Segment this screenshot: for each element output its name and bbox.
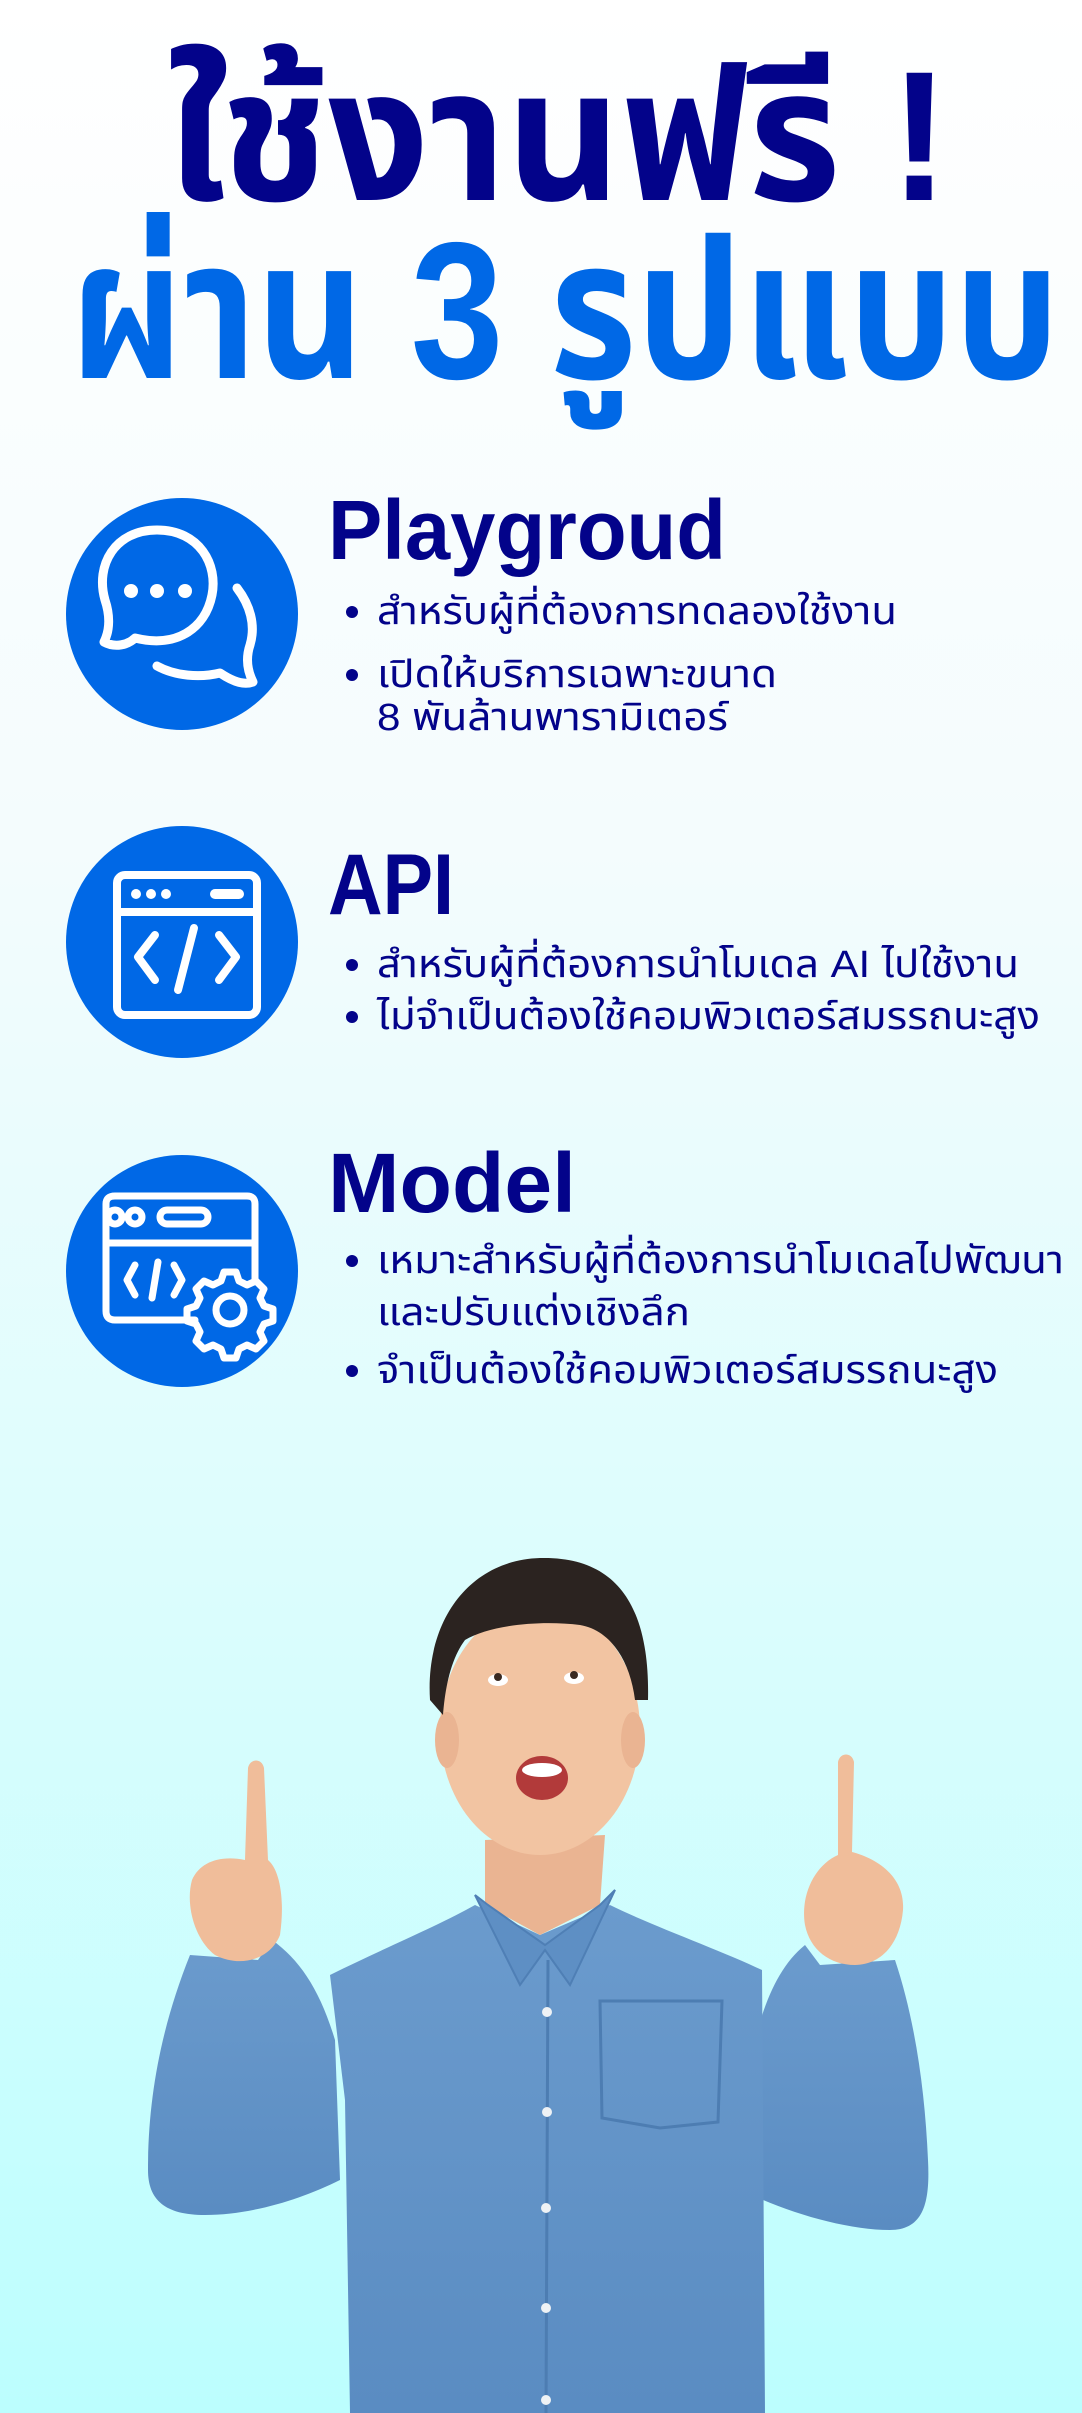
hair	[430, 1558, 648, 1715]
eyes	[488, 1674, 508, 1686]
bullets: Model: จำเป็นต้องใช้คอมพิวเตอร์สมรรถนะสูง	[377, 1350, 998, 1393]
icon: chat bubbles	[66, 498, 298, 730]
bullets: Playground: 8 พันล้านพารามิเตอร์	[377, 697, 729, 739]
bullets: Playground: เปิดให้บริการเฉพาะขนาด	[377, 654, 777, 696]
illustration: surprised man pointing up	[148, 1558, 928, 2413]
left hand pointing	[190, 1760, 282, 1961]
bullets: Playground	[346, 585, 897, 739]
panel: Playground	[66, 483, 897, 739]
bullets: Model	[346, 1234, 1064, 1393]
pocket	[600, 2001, 722, 2128]
panel: Model	[66, 1136, 1064, 1393]
bullets: Model: และปรับแต่งเชิงลึก	[377, 1292, 690, 1334]
bullets: Playground: สำหรับผู้ที่ต้องการทดลองใช้งาน	[377, 585, 897, 634]
placket	[546, 1960, 548, 2413]
left arm sleeve	[148, 1940, 340, 2215]
bullets: API: สำหรับผู้ที่ต้องการนำโมเดล AI ไปใช้งาน	[377, 938, 1019, 987]
right arm sleeve	[752, 1945, 928, 2230]
bullets: Model: เหมาะสำหรับผู้ที่ต้องการนำโมเดลไปพัฒนา	[377, 1234, 1064, 1283]
mouth	[516, 1756, 568, 1800]
bullets: API	[346, 938, 1040, 1039]
icon: browser code	[66, 826, 298, 1058]
title	[70, 34, 1060, 430]
heading: Playgroud: Playgroud	[328, 483, 726, 577]
right hand pointing	[804, 1754, 903, 1965]
heading: Model: Model	[328, 1136, 576, 1230]
panel: API	[66, 826, 1040, 1058]
shirt body	[330, 1905, 765, 2413]
title line 1: ใช้งานฟรี !	[167, 34, 949, 240]
heading: API: API	[328, 837, 454, 933]
icon: browser with gear	[66, 1155, 298, 1387]
bullets: API: ไม่จำเป็นต้องใช้คอมพิวเตอร์สมรรถนะสูง	[376, 996, 1040, 1039]
collar	[475, 1890, 615, 1985]
head	[440, 1605, 640, 1855]
neck	[485, 1835, 605, 1935]
